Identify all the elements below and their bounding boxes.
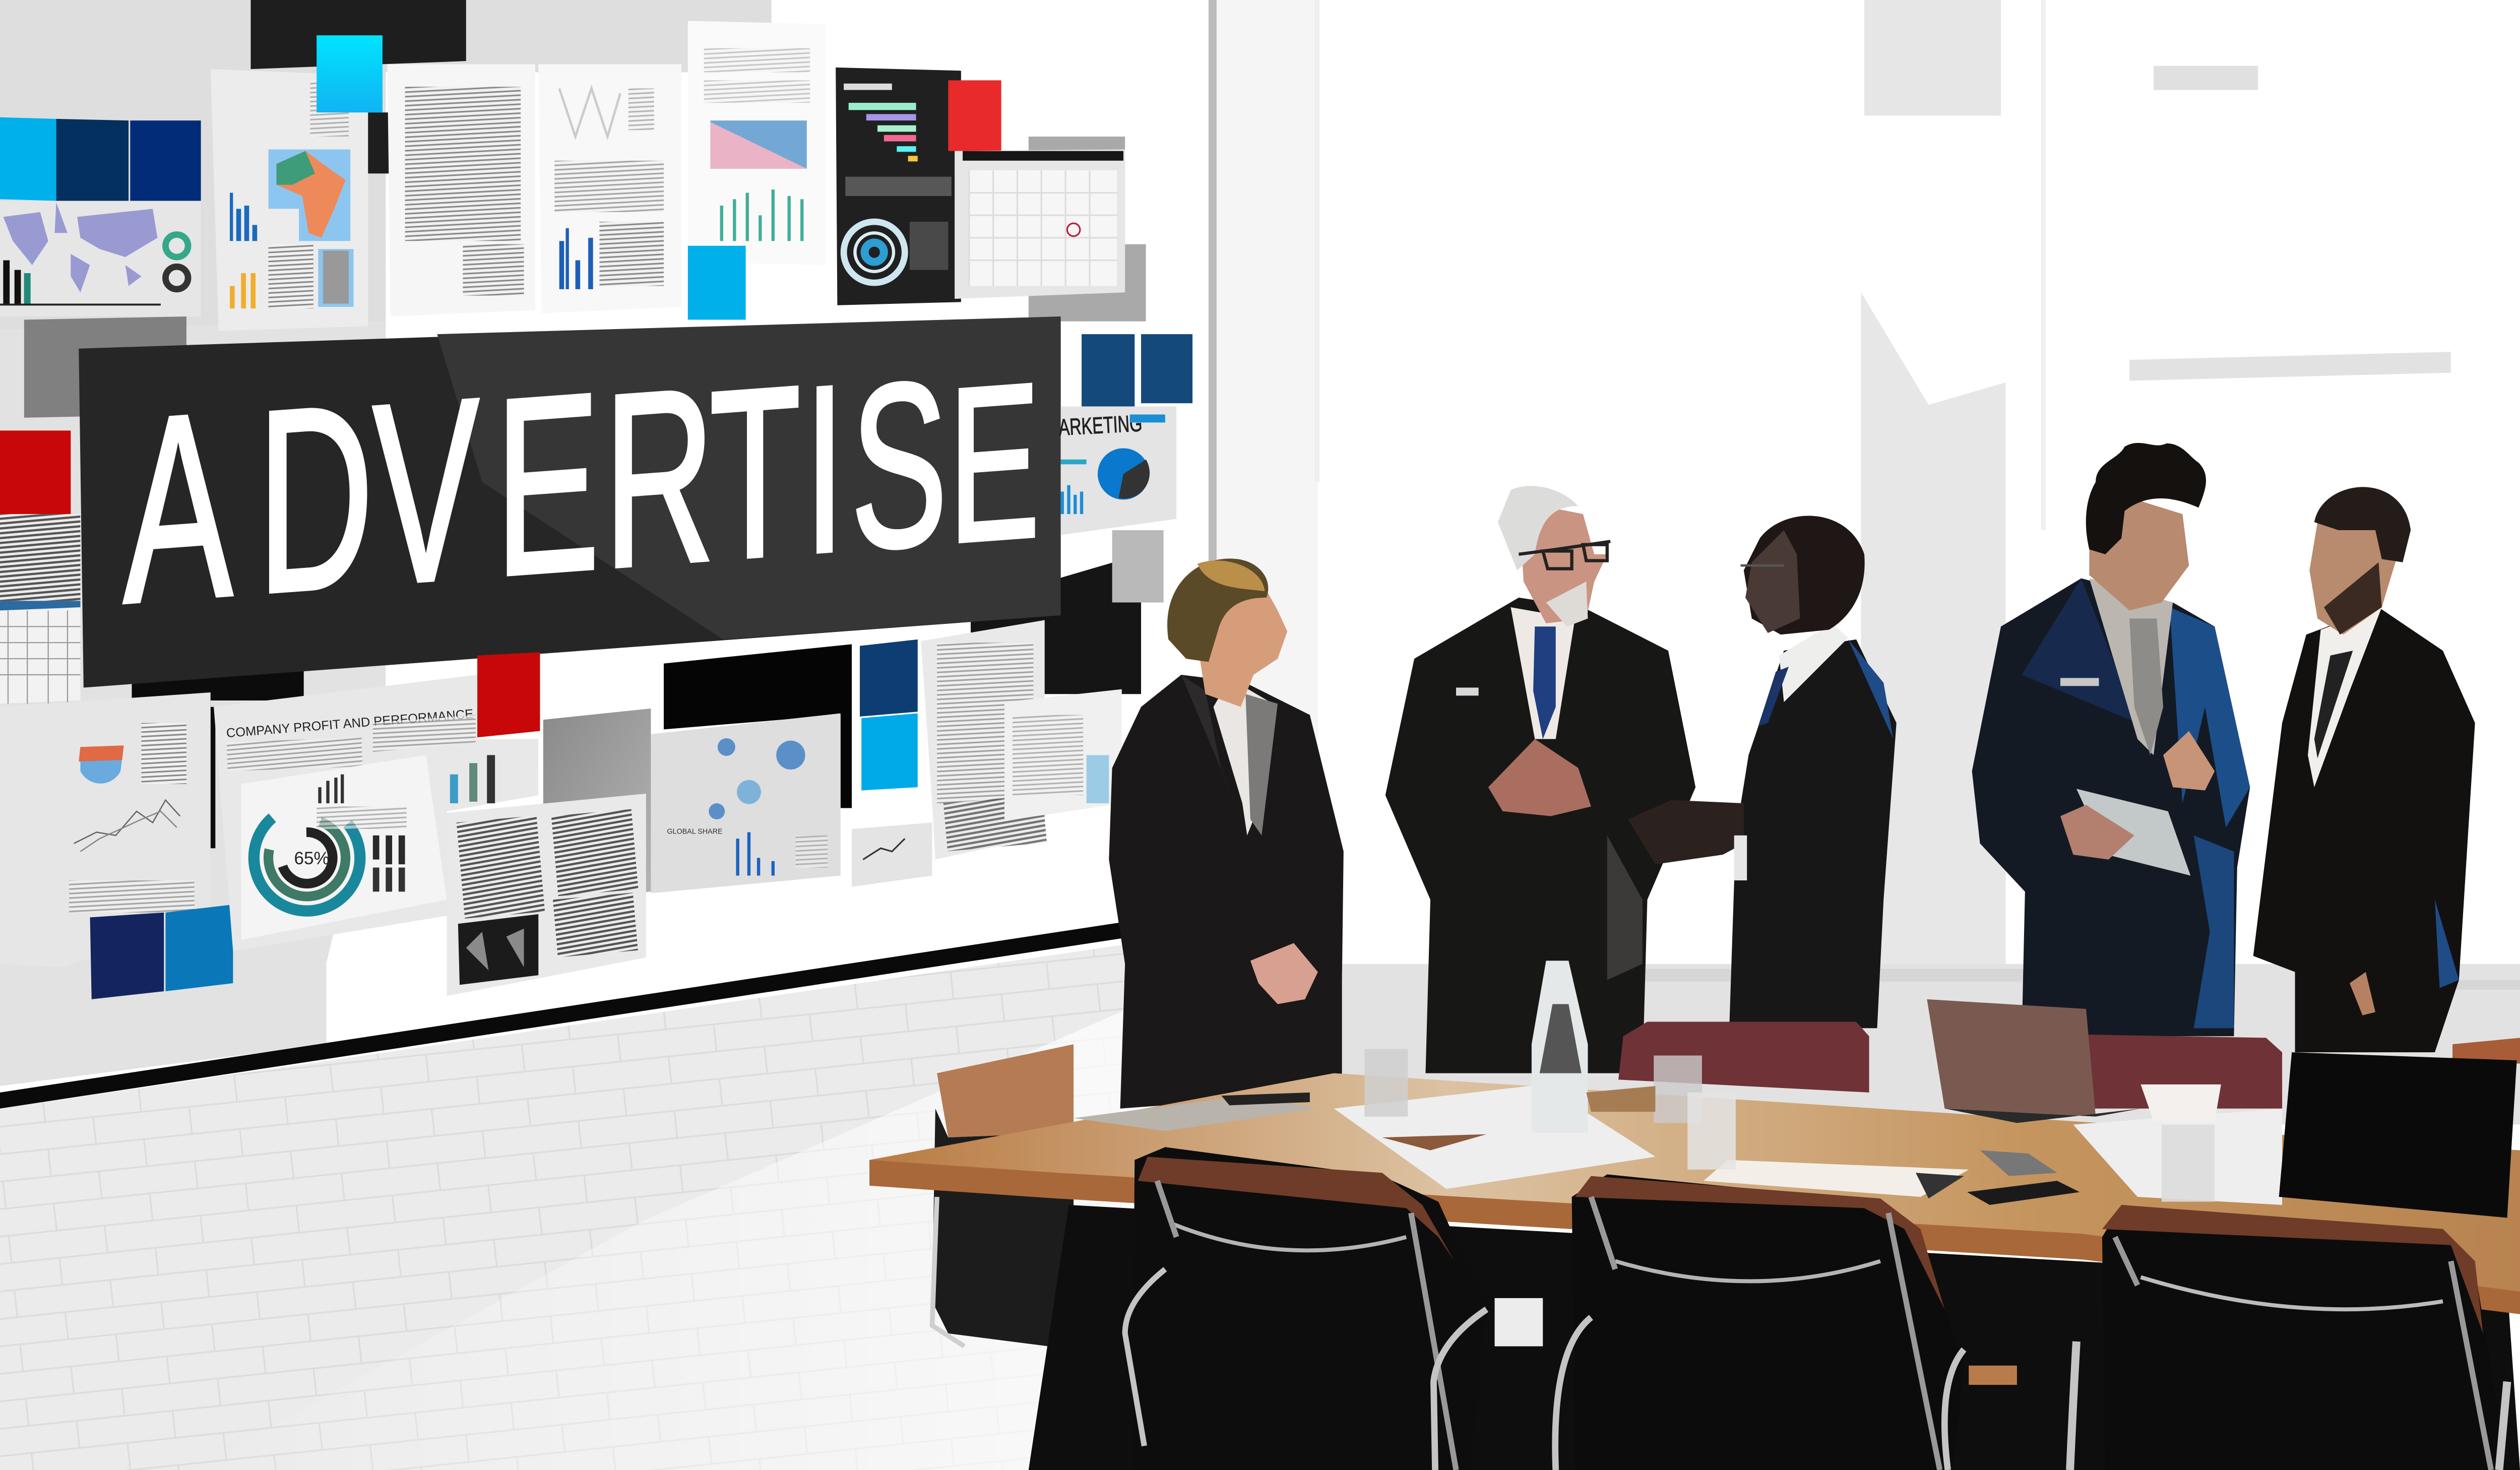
hands [1488, 739, 1591, 816]
photo [458, 914, 538, 985]
document: Africa charts [211, 69, 368, 331]
cyan swatch lower [688, 246, 746, 319]
document: text article with photo [447, 794, 646, 996]
title: V [372, 345, 480, 640]
document: triangle chart page [688, 21, 826, 265]
panel: calendar [955, 149, 1125, 299]
person: older man [1385, 486, 1695, 1073]
donut chart [232, 783, 382, 933]
head [2089, 490, 2189, 610]
person: man with tablet [1972, 443, 2250, 1036]
papers and reflections [1334, 1084, 1655, 1189]
black and colour blocks behind documents [250, 0, 466, 69]
advertising wall [0, 0, 1217, 1109]
document: text page [387, 65, 535, 316]
conference table [869, 961, 2520, 1314]
panel: global share map [651, 713, 841, 893]
navy swatches right [1082, 334, 1192, 407]
title: E [949, 337, 1040, 590]
back chair behind laptop [2073, 1035, 2282, 1109]
notebook [1074, 1096, 1318, 1131]
banner: ADVERTISE [79, 298, 1061, 687]
floor [0, 940, 1157, 1470]
small bar chart [450, 755, 495, 803]
panel: small line chart [852, 822, 932, 887]
title: S [851, 332, 948, 599]
navy and blue swatches bottom [90, 905, 233, 999]
under table darkness [1029, 1205, 2520, 1470]
panel heading: COMPANY PROFIT AND PERFORMANCE [226, 707, 474, 740]
glasses and bottle [1364, 961, 2215, 1202]
front chair right [2070, 1205, 2507, 1470]
panel: company profit and performance: 65% [294, 849, 330, 868]
head [1198, 582, 1287, 707]
front chair left [1125, 1147, 1487, 1470]
cup [2140, 1084, 2221, 1121]
panel: marketing: ARKETING [1058, 410, 1143, 440]
red swatch left [0, 430, 71, 514]
map bubbles [709, 738, 805, 819]
document: report with bars [538, 65, 681, 313]
head [2309, 522, 2398, 634]
document: highlighted text [921, 620, 1047, 860]
head [1744, 516, 1865, 634]
back chair left of laptop [1618, 1022, 1869, 1093]
person: woman [1109, 558, 1344, 1109]
phones [1382, 1134, 2080, 1205]
laptop brown [1927, 999, 2140, 1123]
red swatch center [477, 652, 540, 737]
hands [1250, 943, 1318, 1004]
glasses [1519, 541, 1610, 569]
head [1519, 501, 1607, 623]
document: left text and table [0, 514, 80, 704]
gray swatch right [1112, 530, 1164, 602]
title: D [257, 349, 373, 649]
red swatch top [948, 80, 1001, 151]
document: pie and lines [0, 692, 211, 967]
front chair center [1555, 1174, 1964, 1470]
hands [2060, 805, 2134, 860]
blue colour swatches [0, 117, 201, 201]
laptop black [2279, 1052, 2517, 1218]
tablet [2076, 789, 2190, 875]
person: man in profile [1628, 516, 1897, 1028]
document: side note [1004, 689, 1122, 821]
panel: dark bar chart [836, 68, 961, 305]
panel: company profit and performance [214, 675, 538, 951]
panel: world map [0, 201, 201, 316]
title: R [604, 335, 715, 620]
navy and cyan swatches center [860, 640, 918, 790]
panel: marketing [1058, 407, 1176, 535]
panel: global share map: GLOBAL SHARE [667, 828, 723, 836]
person: man with beard [2253, 487, 2475, 1052]
title: T [710, 336, 801, 611]
left brown chair [932, 1044, 1074, 1350]
title: I [804, 335, 845, 604]
far chair at right [2452, 1038, 2520, 1063]
title: E [495, 340, 600, 629]
cyan swatch [317, 35, 383, 112]
title: A [123, 357, 233, 659]
